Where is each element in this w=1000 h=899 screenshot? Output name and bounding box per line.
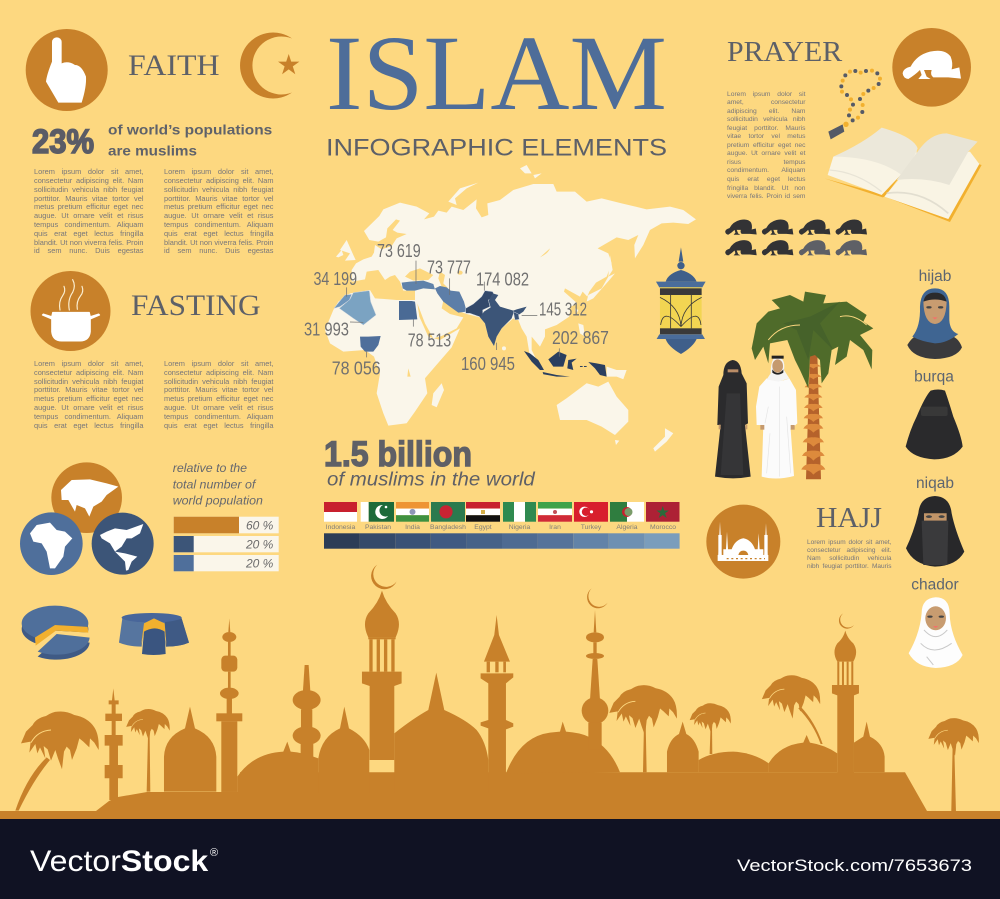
globe: Americas	[92, 513, 154, 575]
text block: faith column 2: tempus condimentum. Aliquam	[164, 220, 274, 229]
flag: Morocco	[646, 502, 680, 531]
text block: fasting column 2: augue. Ut ornare velit et risus	[164, 403, 274, 412]
statistic: 23 percent: 23%	[32, 123, 94, 160]
text block: hajj	[807, 539, 892, 570]
label: burqa: burqa	[914, 369, 954, 386]
icon group: prayer count	[725, 219, 867, 255]
text block: faith column 1	[34, 167, 144, 255]
text block: faith column 1: augue. Ut ornare velit et risus	[34, 211, 144, 220]
heading: fasting: FASTING	[131, 289, 261, 322]
text block: fasting column 2: consectetur adipiscing elit. Nam	[164, 368, 274, 377]
title: ISLAM: ISLAM	[326, 15, 667, 133]
text block: fasting column 1: augue. Ut ornare velit et risus	[34, 403, 144, 412]
text block: prayer: fringilla blandit. Ut non	[727, 185, 806, 192]
icon: 3D pie chart	[22, 606, 90, 660]
illustration: man in white thobe	[756, 356, 797, 478]
note: relative to world population	[173, 461, 263, 508]
icon: prostrating figure in circle	[892, 28, 971, 107]
text block: fasting column 1: tempus condimentum. Aliquam	[34, 412, 144, 421]
icon: mosque in circle	[706, 505, 780, 579]
footer link: VectorStock.com/7653673	[737, 855, 972, 875]
label: chador: chador	[911, 576, 959, 593]
flag: Egypt	[466, 502, 500, 531]
flag: Morocco: Morocco	[650, 524, 676, 531]
text block: faith column 1: sollicitudin vehicula nibh feugiat	[34, 185, 144, 194]
text block: faith column 1: blandit. Ut non viverra felis. Proin	[34, 238, 144, 247]
text block: prayer: viverra felis. Proin id sem	[727, 193, 806, 200]
text block: fasting column 2: Lorem ipsum dolor sit amet,	[164, 359, 274, 368]
text block: prayer: Lorem ipsum dolor sit	[727, 90, 806, 98]
icon: pointing finger in circle	[26, 29, 108, 111]
text block: faith column 2: consectetur adipiscing elit. Nam	[164, 176, 274, 185]
subtitle: infographic elements: INFOGRAPHIC ELEMENTS	[326, 135, 667, 161]
registered mark: ®	[210, 847, 218, 859]
flag: Egypt: Egypt	[474, 524, 492, 531]
headline caption: of muslims in the world	[327, 469, 536, 490]
flag: Turkey: Turkey	[581, 524, 602, 531]
illustration: hijab	[907, 288, 962, 359]
text block: fasting column 1: Lorem ipsum dolor sit amet,	[34, 359, 144, 368]
icon: 3D cut cylinder	[119, 613, 189, 655]
illustration: chador	[909, 597, 963, 668]
label: hijab: hijab	[919, 268, 951, 285]
text block: prayer: adipiscing elit. Nam	[727, 108, 806, 115]
illustration: burqa	[906, 389, 963, 459]
label: niqab: niqab	[916, 475, 954, 492]
text block: hajj: Lorem ipsum dolor sit amet,	[807, 539, 892, 546]
map figure labels: 73 619	[377, 240, 421, 261]
skyline silhouette	[0, 565, 1000, 819]
footer bar	[0, 819, 1000, 899]
text block: fasting column 1	[34, 359, 144, 430]
text block: prayer: vitae tortor vel metus	[727, 133, 806, 140]
text block: faith column 2: porttitor. Mauris vitae tortor vel	[164, 194, 274, 203]
text block: faith column 2: Lorem ipsum dolor sit amet,	[164, 167, 274, 176]
text block: fasting column 2: tempus condimentum. Aliquam	[164, 412, 274, 421]
footer logo: VectorStock	[30, 844, 209, 878]
text block: prayer: amet, consectetur	[727, 99, 806, 106]
flag: Turkey	[574, 502, 608, 531]
text block: faith column 1: consectetur adipiscing elit. Nam	[34, 176, 144, 185]
text block: fasting column 2: sollicitudin vehicula nibh feugiat	[164, 377, 274, 386]
text block: prayer: feugiat porttitor. Mauris	[727, 125, 806, 132]
text block: fasting column 1: sollicitudin vehicula nibh feugiat	[34, 377, 144, 386]
statistic caption line 1: of world’s populations	[108, 123, 272, 138]
flag: Iran	[538, 502, 572, 531]
text block: faith column 2: metus pretium efficitur eget nec	[164, 202, 274, 211]
text block: faith column 2: blandit. Ut non viverra felis. Proin	[164, 238, 274, 247]
text block: fasting column 1: consectetur adipiscing elit. Nam	[34, 368, 144, 377]
text block: fasting column 1: porttitor. Mauris vitae tortor vel	[34, 385, 144, 394]
text block: faith column 2	[164, 167, 274, 255]
text block: prayer: pretium efficitur eget nec	[727, 142, 806, 149]
text block: fasting column 2: porttitor. Mauris vitae tortor vel	[164, 385, 274, 394]
text block: prayer: sollicitudin vehicula nibh	[727, 116, 806, 123]
headline statistic: 1.5 billion: 1.5 billion	[324, 436, 472, 474]
flags row	[324, 502, 680, 531]
map figure labels: 34 199	[314, 269, 357, 289]
note: relative to world population: world population	[173, 494, 263, 508]
text block: prayer: quis erat eget lectus	[727, 176, 806, 183]
map figure labels: 78 513	[408, 331, 451, 351]
icon: three globes	[20, 462, 154, 575]
icon: crescent and star	[240, 33, 299, 99]
text block: faith column 1: porttitor. Mauris vitae tortor vel	[34, 194, 144, 203]
flag: Bangladesh	[430, 502, 466, 531]
flag: Iran: Iran	[549, 524, 561, 531]
icon: prayer beads	[828, 69, 882, 139]
text block: faith column 1: id sem nunc. Duis egestas	[34, 246, 144, 255]
flag: India	[396, 502, 429, 531]
heading: hajj: HAJJ	[816, 503, 882, 534]
flag: Nigeria: Nigeria	[509, 524, 530, 531]
text block: faith column 1: quis erat eget lectus fringilla	[34, 229, 144, 238]
heading: prayer: PRAYER	[727, 37, 843, 68]
text block: fasting column 2	[164, 359, 274, 430]
text block: prayer: condimentum. Aliquam	[727, 167, 806, 174]
text block: hajj: nibh feugiat porttitor. Mauris	[807, 563, 892, 570]
text block: faith column 2: id sem nunc. Duis egestas	[164, 246, 274, 255]
map figure labels: 174 082	[476, 269, 529, 290]
text block: fasting column 1: metus pretium efficitur eget nec	[34, 394, 144, 403]
flag: Indonesia	[324, 502, 357, 531]
text block: prayer	[727, 90, 806, 200]
flag: Algeria: Algeria	[616, 524, 638, 531]
illustration: date palm	[752, 292, 873, 479]
flag: Indonesia: Indonesia	[326, 524, 355, 531]
bar: 20 percent dark: 20 %	[245, 538, 274, 552]
text block: prayer: risus tempus	[727, 159, 806, 166]
note: relative to world population: total number of	[173, 478, 257, 492]
flag: Pakistan	[361, 502, 394, 531]
bar chart: population share	[174, 517, 279, 571]
bar: 60 percent: 60 %	[246, 518, 274, 532]
map figure labels: 202 867	[552, 327, 609, 348]
globe: Asia	[51, 462, 122, 533]
text block: fasting column 2: quis erat eget lectus fringilla	[164, 421, 274, 430]
text block: faith column 1: metus pretium efficitur eget nec	[34, 202, 144, 211]
flag: Algeria	[610, 502, 644, 531]
text block: hajj: Nam sollicitudin vehicula	[807, 555, 892, 562]
icon: open book	[824, 128, 982, 222]
text block: prayer: augue. Ut ornare velit et	[727, 150, 806, 157]
bar: 20 percent light: 20 %	[245, 557, 274, 571]
icon: cooking pot in circle	[30, 271, 110, 351]
text block: hajj: consectetur adipiscing elit.	[807, 547, 892, 554]
text block: faith column 1: tempus condimentum. Aliquam	[34, 220, 144, 229]
map figure labels	[304, 240, 609, 379]
globe: Africa	[20, 512, 83, 575]
map figure labels: 73 777	[427, 257, 471, 278]
heading: faith: FAITH	[128, 49, 220, 82]
illustration: woman in black abaya	[715, 360, 751, 478]
text block: fasting column 2: metus pretium efficitur eget nec	[164, 394, 274, 403]
map figure labels: 78 056	[332, 357, 381, 379]
note: relative to world population: relative to the	[173, 461, 247, 475]
flag: India: India	[405, 524, 420, 531]
map figure labels: 145 312	[539, 299, 587, 320]
text block: fasting column 1: quis erat eget lectus fringilla	[34, 421, 144, 430]
map figure labels: 31 993	[304, 319, 349, 340]
text block: faith column 2: quis erat eget lectus fringilla	[164, 229, 274, 238]
flag: Nigeria	[503, 502, 536, 531]
shaded gradient scale	[324, 533, 680, 549]
text block: faith column 2: augue. Ut ornare velit et risus	[164, 211, 274, 220]
flag: Pakistan: Pakistan	[365, 524, 391, 531]
text block: faith column 2: sollicitudin vehicula nibh feugiat	[164, 185, 274, 194]
statistic caption line 2: are muslims	[108, 144, 197, 159]
map figure labels: 160 945	[461, 353, 515, 374]
flag: Bangladesh: Bangladesh	[430, 524, 466, 531]
text block: faith column 1: Lorem ipsum dolor sit amet,	[34, 167, 144, 176]
icon: lantern	[656, 247, 706, 354]
illustration: niqab	[906, 496, 964, 567]
world map	[325, 165, 696, 452]
